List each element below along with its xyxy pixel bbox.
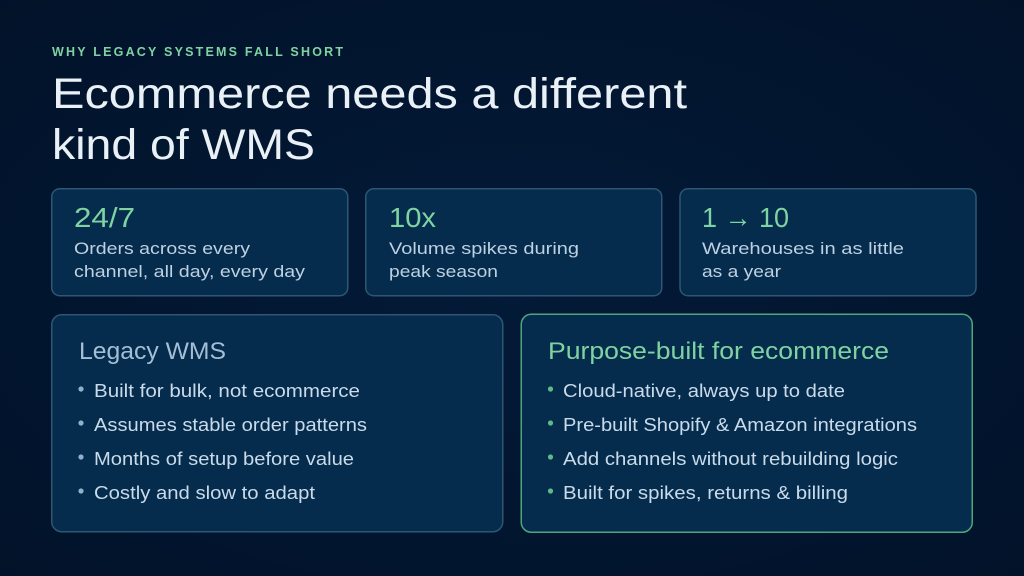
stat card: 1 to 10 [680, 189, 976, 296]
list: legacy drawbacks: Months of setup before value [94, 449, 354, 469]
title [52, 70, 687, 169]
list: purpose-built benefits: Cloud-native, always up to date [563, 381, 845, 401]
heading: legacy WMS: Legacy WMS [79, 338, 226, 365]
stat card: 24/7 [52, 189, 348, 296]
stat card: 1 to 10: as a year [702, 262, 781, 281]
heading: purpose-built: Purpose-built for ecommerce [548, 338, 889, 365]
list: legacy drawbacks: Built for bulk, not ecommerce [94, 381, 360, 401]
stat card: 1 to 10: 1 → 10 [702, 202, 789, 233]
stat card: 24/7: channel, all day, every day [74, 262, 306, 281]
stat card: 10x: peak season [389, 262, 498, 281]
stat card: 10x [366, 189, 662, 296]
stat card: 10x: Volume spikes during [389, 239, 579, 258]
panel: purpose-built [521, 314, 972, 532]
list: purpose-built benefits [548, 381, 917, 503]
list: purpose-built benefits: Add channels without rebuilding logic [563, 449, 898, 469]
title: kind of WMS [52, 121, 315, 169]
list: legacy drawbacks: Costly and slow to adapt [94, 483, 315, 503]
panel: legacy WMS [52, 315, 503, 532]
eyebrow label: WHY LEGACY SYSTEMS FALL SHORT [52, 45, 343, 59]
list: purpose-built benefits: Built for spikes, returns & billing [563, 483, 848, 503]
list: purpose-built benefits: Pre-built Shopify & Amazon integrations [563, 415, 917, 435]
stat card: 24/7: 24/7 [74, 202, 135, 233]
stat card: 24/7: Orders across every [74, 239, 251, 258]
list: legacy drawbacks [78, 381, 367, 503]
stat card: 10x: 10x [389, 202, 436, 233]
title: Ecommerce needs a different [52, 70, 687, 118]
stat card: 1 to 10: Warehouses in as little [702, 239, 904, 258]
list: legacy drawbacks: Assumes stable order patterns [94, 415, 367, 435]
